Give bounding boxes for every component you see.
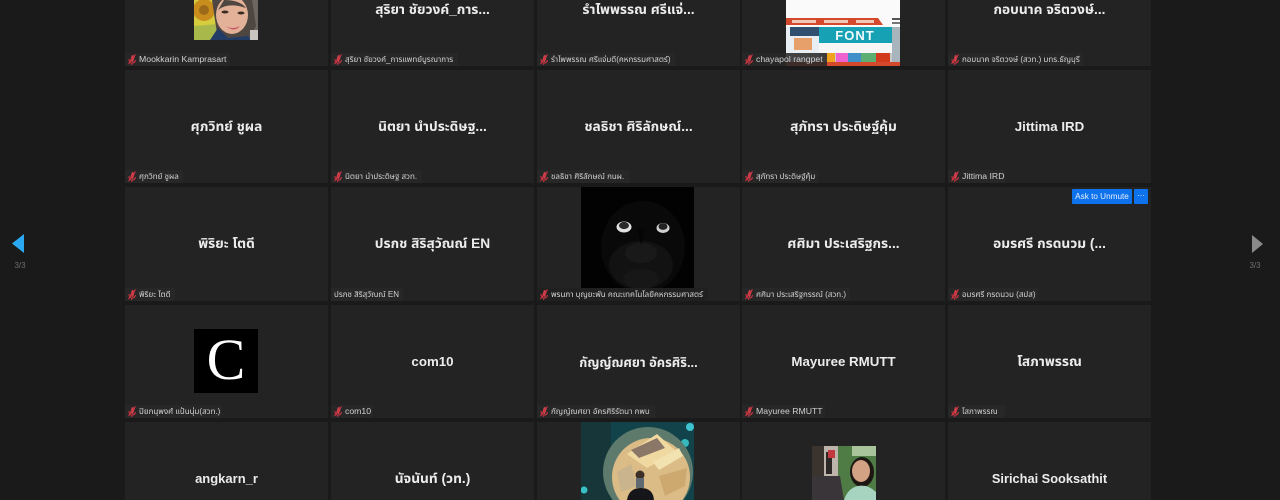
- tile: Mookkarin Kamprasart: [125, 0, 328, 66]
- tile: โสภาพรรณ: [948, 305, 1151, 418]
- participant name: ศุภวิทย์ ชูผล: [191, 119, 262, 134]
- name label: รำไพพรรณ ศรีแจ่มดี(คหกรรมศาสตร์): [551, 55, 670, 64]
- tile: กัญญ์ฌศยา อัครศิริ: [537, 305, 740, 418]
- tile: พรนภา บุญยะพัน: [537, 187, 740, 301]
- name label: [742, 405, 825, 418]
- participant name: ปรกช สิริสุวัณณ์ EN: [375, 236, 490, 251]
- name label: ศศิมา ประเสริฐกรรณ์ (สวท.): [756, 290, 846, 299]
- name label: สุภัทรา ประดิษฐ์คุ้ม: [756, 172, 815, 181]
- avatar: FONT poster: FONT: [835, 28, 875, 43]
- name label: อมรศรี กรดนวม (สปส): [962, 290, 1036, 299]
- name label: โสภาพรรณ: [962, 407, 998, 416]
- avatar: woman portrait: [812, 446, 876, 500]
- participant name: นัจนันท์ (วท.): [395, 471, 470, 486]
- name label: [125, 53, 230, 66]
- name label: com10: [345, 406, 371, 416]
- name label: [537, 288, 708, 301]
- tile: Jittima IRD: [948, 70, 1151, 183]
- arrow: previous page: [12, 234, 24, 253]
- name label: [948, 53, 1083, 66]
- participant name: angkarn_r: [195, 471, 258, 486]
- tile: รำไพพรรณ ศรีแจ่มดี: [537, 0, 740, 66]
- name label: กัญญ์ฌศยา อัครศิริรัตนา กพบ: [551, 407, 650, 416]
- name label: chayapol rangpet: [756, 54, 823, 64]
- name label: Mookkarin Kamprasart: [139, 54, 226, 64]
- name label: ศุภวิทย์ ชูผล: [139, 172, 179, 181]
- name label: [537, 53, 675, 66]
- name label: [331, 170, 422, 183]
- tile: ปรกช สิริสุวัณณ์ EN: [331, 187, 534, 301]
- name label: [125, 405, 222, 418]
- name label: [742, 170, 818, 183]
- tile: สุริยา ชัยวงค์: [331, 0, 534, 66]
- avatar: owl: [581, 187, 694, 288]
- name label: Mayuree RMUTT: [756, 406, 823, 416]
- name label: Jittima IRD: [962, 171, 1004, 181]
- button: Ask to Unmute: Ask to Unmute: [1075, 192, 1129, 201]
- name label: ปรกช สิริสุวัณณ์ EN: [334, 290, 399, 299]
- name label: [537, 405, 655, 418]
- participant name: com10: [411, 354, 454, 369]
- name label: นิตยา นำประดิษฐ สวท.: [345, 172, 417, 181]
- tile: ศุภวิทย์ ชูผล: [125, 70, 328, 183]
- tile: นัจนันท์ (วท.): [331, 422, 534, 500]
- participant name: Sirichai Sooksathit: [992, 471, 1107, 486]
- name label: ชลธิชา ศิริลักษณ์ กนผ.: [551, 172, 624, 181]
- participant name: สุภัทรา ประดิษฐ์คุ้ม: [790, 119, 897, 134]
- name label: [742, 53, 827, 66]
- tile: Sirichai Sooksathit: [948, 422, 1151, 500]
- name label: ปิยกนุพงศ์ แป้นนุ่ม(สวท.): [139, 407, 220, 416]
- participant name: อมรศรี กรดนวม (...: [993, 236, 1106, 251]
- name label: [948, 170, 1005, 183]
- tile: สุภัทรา ประดิษฐ์คุ้ม: [742, 70, 945, 183]
- avatar: letter C: [194, 329, 258, 393]
- avatar: glass ball photo: [581, 422, 694, 500]
- tile: angkarn_r: [125, 422, 328, 500]
- participant name: รำไพพรรณ ศรีแจ่...: [582, 2, 695, 17]
- tile: chayapol rangpet: [742, 0, 945, 66]
- name label: สุริยา ชัยวงค์_การแพทย์บูรณาการ: [345, 55, 453, 64]
- tile: woman photo: [742, 422, 945, 500]
- tile: อมรศรี กรดนวม: [948, 187, 1151, 301]
- name label: [125, 170, 183, 183]
- arrow: next page: [1252, 235, 1263, 253]
- tile: ชลธิชา ศิริลักษณ์: [537, 70, 740, 183]
- tile: นิตยา นำประดิษฐ: [331, 70, 534, 183]
- tile: glass ball photo: [537, 422, 740, 500]
- name label: [948, 288, 1038, 301]
- name label: [331, 405, 373, 418]
- name label: กอบนาค จริตวงษ์ (สวท.) มทร.ธัญบุรี: [962, 55, 1080, 64]
- name label: [331, 288, 403, 301]
- page indicator left: 3/3: [14, 261, 26, 270]
- participant name: Jittima IRD: [1015, 119, 1084, 134]
- name label: [948, 405, 1005, 418]
- button: Ask to Unmute: [1072, 189, 1132, 204]
- tile: Mayuree RMUTT: [742, 305, 945, 418]
- participant name: ชลธิชา ศิริลักษณ์...: [584, 119, 693, 134]
- tile: com10: [331, 305, 534, 418]
- participant name: ศศิมา ประเสริฐกร...: [787, 236, 900, 251]
- participant name: โสภาพรรณ: [1017, 354, 1082, 369]
- participant name: นิตยา นำประดิษฐ...: [378, 119, 487, 134]
- tile: ปิยกนุพงศ์ แป้นนุ่ม: [125, 305, 328, 418]
- avatar: FONT poster: [786, 0, 900, 66]
- tile: ศศิมา ประเสริฐกรรณ์: [742, 187, 945, 301]
- tile: พิริยะ โตดี: [125, 187, 328, 301]
- name label: พรนภา บุญยะพัน คณะเทคโนโลยีคหกรรมศาสตร์: [551, 290, 703, 299]
- page indicator right: 3/3: [1249, 261, 1261, 270]
- name label: [125, 288, 175, 301]
- participant name: Mayuree RMUTT: [791, 354, 896, 369]
- participant name: กอบนาค จริตวงษ์...: [994, 2, 1105, 17]
- participant name: กัญญ์ฌศยา อัครศิริ...: [579, 354, 698, 370]
- name label: [331, 53, 458, 66]
- name label: พิริยะ โตดี: [139, 290, 171, 299]
- participant name: สุริยา ชัยวงค์_การ...: [375, 2, 490, 17]
- avatar: sunflower portrait: [194, 0, 258, 40]
- button: more options: ···: [1137, 191, 1145, 200]
- tile: กอบนาค จริตวงษ์: [948, 0, 1151, 66]
- participant name: พิริยะ โตดี: [198, 236, 255, 251]
- name label: [537, 170, 630, 183]
- button: more options: [1134, 189, 1148, 204]
- name label: [742, 288, 850, 301]
